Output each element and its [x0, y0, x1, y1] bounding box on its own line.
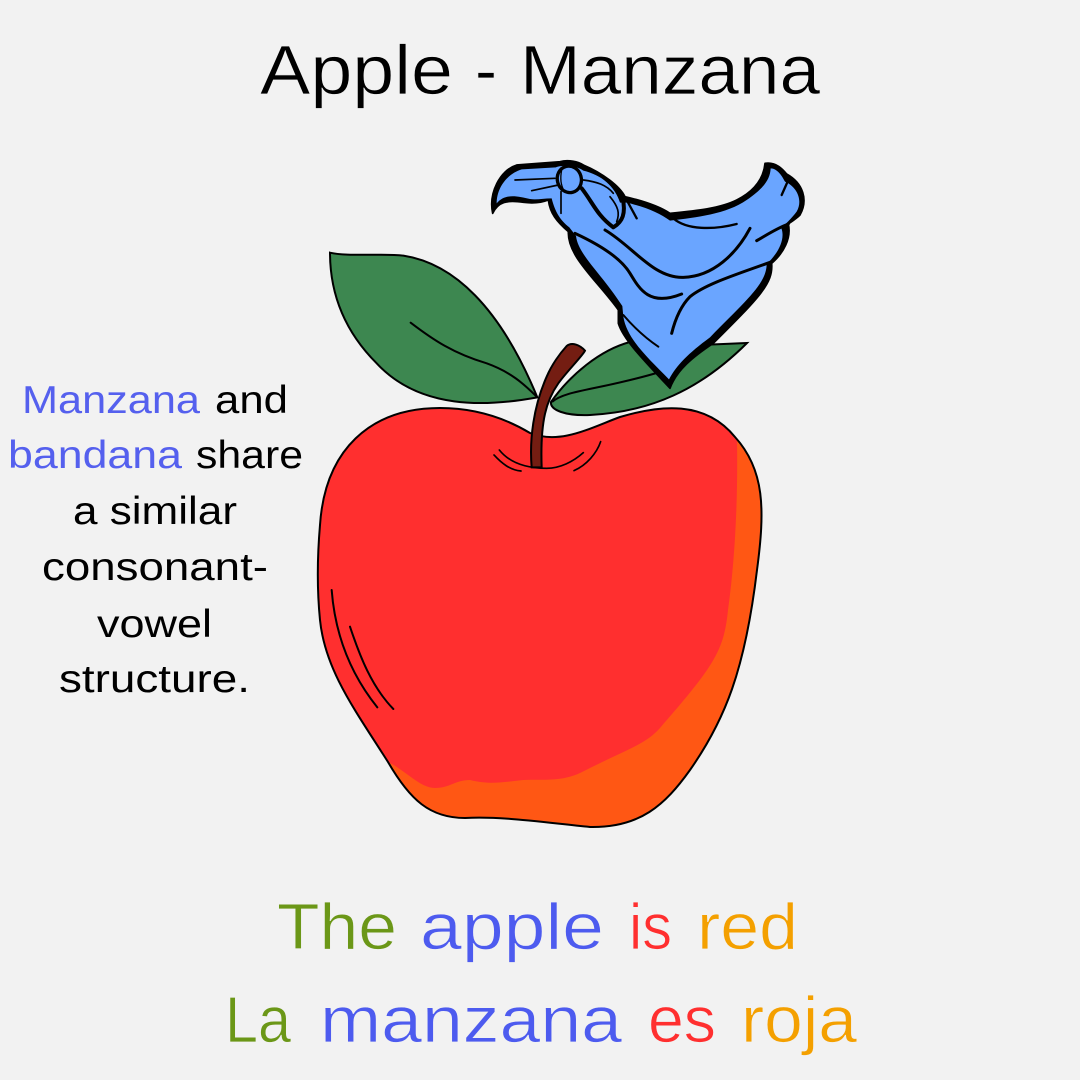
text block: manzana and bandana note: vowel [97, 603, 212, 646]
infographic canvas [10, 44, 856, 1056]
text block: manzana and bandana note [8, 379, 303, 701]
text block: manzana and bandana note: a similar [73, 490, 237, 533]
spanish sentence: la manzana es roja: roja [741, 983, 858, 1056]
english sentence: the apple is red: is [629, 890, 672, 963]
icon: blue bandana [492, 161, 804, 388]
apple body [300, 400, 762, 827]
text block: manzana and bandana note: structure. [59, 658, 250, 701]
spanish sentence: la manzana es roja: manzana [320, 983, 623, 1056]
english sentence: the apple is red: apple [420, 890, 604, 963]
text block: manzana and bandana note: consonant- [42, 546, 268, 589]
apple highlight lines [332, 590, 393, 709]
title: - [475, 31, 497, 109]
title: Manzana [520, 31, 820, 109]
spanish sentence: la manzana es roja: es [648, 983, 716, 1056]
text block: manzana and bandana note: Manzana [22, 379, 201, 422]
title: Apple [260, 31, 453, 109]
icon: stem and dimple lines [494, 344, 601, 471]
english sentence: the apple is red: The [277, 890, 397, 963]
text block: manzana and bandana note: and [215, 379, 288, 422]
spanish sentence: la manzana es roja: La [225, 983, 292, 1056]
english sentence: the apple is red [277, 890, 798, 963]
illustration: apple wearing a bandana [300, 161, 804, 827]
icon: right leaf [551, 342, 747, 415]
text block: manzana and bandana note: share [196, 434, 303, 477]
title [260, 31, 820, 109]
icon: left leaf [330, 253, 537, 403]
english sentence: the apple is red: red [697, 890, 798, 963]
text block: manzana and bandana note: bandana [8, 434, 183, 477]
spanish sentence: la manzana es roja [225, 983, 858, 1056]
